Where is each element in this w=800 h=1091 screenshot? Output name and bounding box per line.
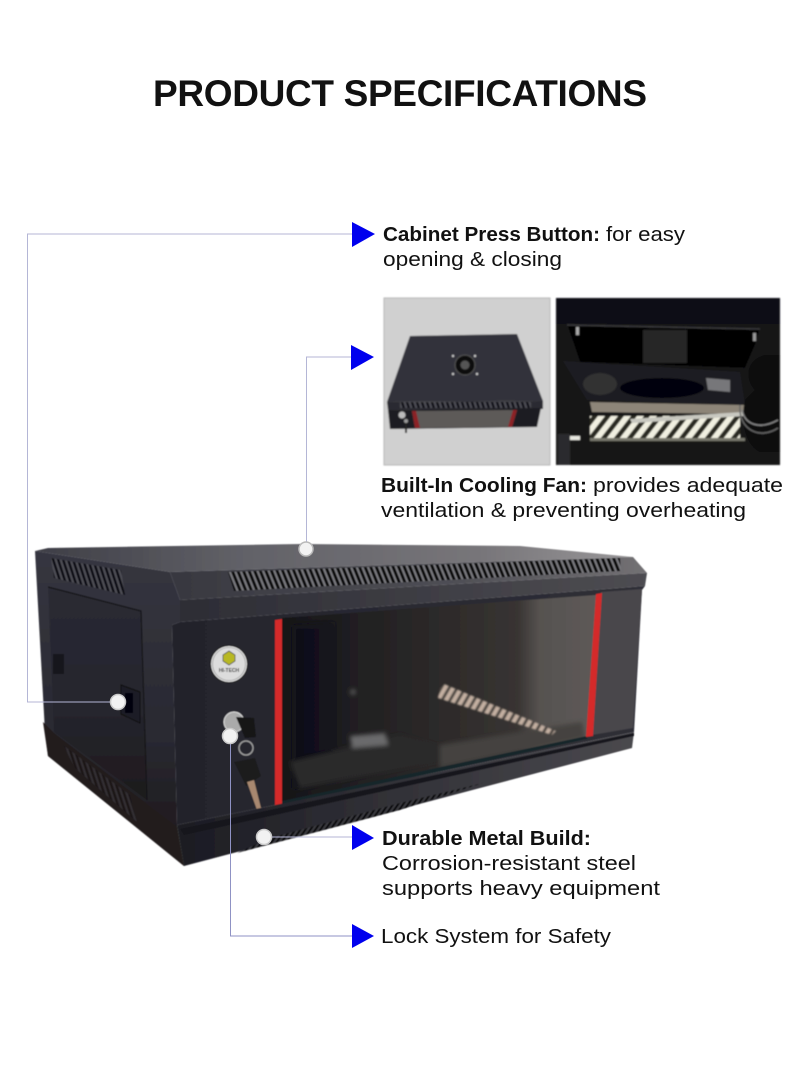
text: cabinet press button [383,223,686,271]
text: built-in cooling fan: ventilation & preventing overheating [381,499,746,522]
glass reflected vent bars [438,684,556,735]
text: built-in cooling fan: Built-In Cooling Fan: [381,474,587,497]
red strip right [586,593,602,737]
side latch press button [121,685,140,723]
text: built-in cooling fan: provides adequate [593,474,783,497]
text: durable metal build: Durable Metal Build: [382,827,591,850]
front vents [228,558,621,591]
cabinet left side [35,551,184,866]
brand badge: HI-TECH [219,668,240,674]
glass reflections [290,622,585,790]
lower side vents [63,745,137,822]
marker dot: lock [222,728,238,744]
side vents [51,558,125,595]
arrow: metal build [352,825,374,850]
text: cabinet press button: Cabinet Press Button: [383,223,600,246]
connector: metal build [264,836,352,838]
connector: cooling fan [306,357,352,549]
arrow: press button [352,222,375,247]
text: durable metal build: supports heavy equipment [382,877,660,900]
connector: lock system [230,737,352,936]
marker dot: press button [110,694,126,710]
thumbnail: cabinet top view [384,298,550,465]
cabinet product photo [35,544,647,866]
glass window [282,595,596,806]
cabinet top panel [35,544,633,572]
marker dot: cooling fan [299,542,313,556]
lower side base [43,722,184,866]
arrow: cooling fan [351,345,374,370]
cabinet base [177,732,634,866]
text: lock system: Lock System for Safety [381,925,612,948]
side latch upper [53,654,64,674]
thumbnail: internal cooling fan [556,298,780,465]
text: durable metal build: Corrosion-resistant steel [382,852,636,875]
brand badge [210,646,248,682]
text: cabinet press button: opening & closing [383,248,562,271]
side door panel [48,587,147,800]
arrow: lock system [352,924,374,948]
door lock and key [224,712,261,810]
hood bevel [170,557,647,600]
title: PRODUCT SPECIFICATIONS [153,73,647,114]
text: durable metal build [382,827,660,900]
text: cabinet press button: for easy [606,223,686,246]
hood front [180,573,647,622]
connector: cabinet press button [28,234,352,702]
door frame [172,586,645,825]
right door section [592,589,642,735]
text: built-in cooling fan [381,474,783,522]
red strip left [275,619,282,807]
marker dot: metal build [256,830,272,844]
